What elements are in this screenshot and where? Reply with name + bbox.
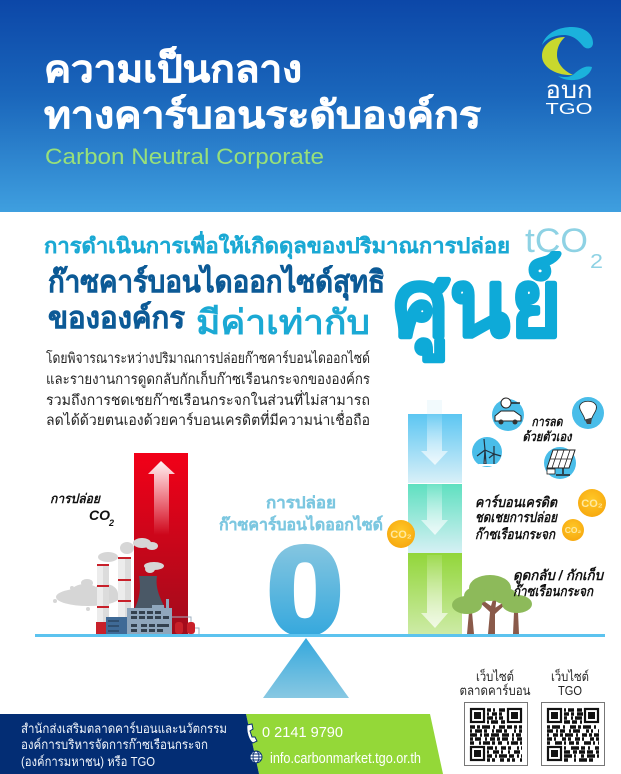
tCO2 label: 2: [590, 251, 603, 273]
smoke: [53, 538, 164, 611]
body text: รวมถึงการชดเชยก๊าซเรือนกระจกในส่วนที่ไม่สามารถ: [46, 390, 370, 409]
label: self reduction: [522, 414, 573, 444]
heading: zero emissions: ก๊าซคาร์บอนไดออกไซด์: [219, 515, 383, 534]
QR code: TGO: [542, 702, 604, 766]
phone number: 0 2141 9790: [262, 724, 343, 741]
label: carbon market website: [460, 667, 531, 698]
label: TGO website: TGO: [558, 683, 582, 698]
heading: intro line: การดำเนินการเพื่อให้เกิดดุลของปริมาณการปล่อย: [44, 230, 510, 260]
icon: coin CO2 large: CO₂: [581, 498, 603, 510]
label: carbon credits: ก๊าซเรือนกระจก: [475, 526, 556, 542]
icon: trees: [452, 575, 532, 634]
label: TGO website: เว็บไซต์: [551, 667, 589, 684]
logo: TGO: TGO: [546, 101, 592, 118]
heading: net carbon dioxide: ก๊าซคาร์บอนไดออกไซด์สุทธิ: [48, 264, 385, 301]
footer bar: contact: [0, 714, 443, 774]
label: self reduction: การลด: [532, 414, 564, 429]
logo: TGO: [542, 27, 593, 118]
icon: coin CO2 centre: CO₂: [390, 529, 412, 541]
icon: phone: [247, 724, 257, 743]
icon: wind turbines: [472, 437, 502, 467]
label: sequestration: ก๊าซเรือนกระจก: [513, 583, 594, 599]
balance beam: [35, 634, 605, 637]
agency name: องค์การบริหารจัดการก๊าซเรือนกระจก: [21, 737, 208, 752]
stacked offset column: [408, 400, 462, 634]
label: carbon market website: เว็บไซต์: [476, 667, 514, 684]
icon: coin CO2 small: CO₂: [565, 525, 581, 535]
label: emissions: CO: [89, 507, 110, 523]
icon: light bulb: [572, 397, 604, 429]
agency name: (องค์การมหาชน) หรือ TGO: [21, 754, 155, 769]
title: ทางคาร์บอนระดับองค์กร: [44, 94, 482, 137]
title: ความเป็นกลาง: [44, 46, 302, 91]
QR code: carbon market: [464, 702, 528, 766]
icon: coin CO2 centre: [387, 520, 415, 548]
balance fulcrum: [263, 638, 349, 698]
label: carbon credits: คาร์บอนเครดิต: [475, 494, 558, 510]
label: self reduction: ด้วยตัวเอง: [522, 429, 573, 444]
subtitle: Carbon Neutral Corporate: [45, 144, 324, 169]
tCO2 label: [525, 222, 603, 273]
body text: ลดได้ด้วยตนเองด้วยคาร์บอนเครดิตที่มีความน่าเชื่อถือ: [46, 410, 370, 429]
icon: factory: [53, 538, 199, 634]
chimneys: [97, 564, 109, 634]
number zero: 0: [267, 522, 343, 660]
cooling tower: [134, 576, 166, 610]
label: emissions: การปล่อย: [50, 491, 101, 506]
label: carbon credits: ชดเชยการปล่อย: [475, 509, 558, 525]
icon: solar panel: [544, 447, 576, 479]
icon: electric car: [492, 398, 524, 431]
label: emissions: 2: [108, 518, 114, 528]
body text: โดยพิจารณาระหว่างปริมาณการปล่อยก๊าซคาร์บอนไดออกไซด์: [46, 349, 370, 367]
label: carbon market website: ตลาดคาร์บอน: [460, 683, 531, 698]
icon: coin CO2 small: [562, 519, 584, 541]
heading: zero emissions: การปล่อย: [266, 495, 336, 512]
icon: globe: [250, 751, 262, 763]
title: [44, 46, 482, 137]
body text: และรายงานการดูดกลับกักเก็บก๊าซเรือนกระจกขององค์กร: [46, 369, 370, 388]
label: sequestration: ดูดกลับ / กักเก็บ: [513, 566, 605, 584]
tanks: [172, 617, 199, 634]
label: sequestration: [513, 566, 605, 599]
tCO2 label: tCO: [525, 222, 588, 260]
heading: organisation: ขององค์กร: [48, 301, 185, 335]
agency name: สำนักส่งเสริมตลาดคาร์บอนและนวัตกรรม: [21, 721, 227, 736]
icon: coin CO2 large: [578, 489, 606, 517]
website: info.carbonmarket.tgo.or.th: [270, 751, 421, 767]
heading: zero word: ศูนย์: [393, 251, 562, 363]
red emissions bar with arrow: [134, 453, 188, 634]
label: emissions: [50, 491, 114, 528]
heading: zero emissions: [219, 495, 383, 534]
heading: equals: มีค่าเท่ากับ: [196, 304, 370, 342]
body text: [46, 349, 370, 429]
label: carbon credits: [475, 494, 558, 542]
agency name: [21, 721, 227, 769]
label: TGO website: [551, 667, 589, 698]
logo: TGO: อบก: [546, 77, 592, 104]
header band: [0, 0, 621, 212]
buildings: [106, 617, 128, 634]
